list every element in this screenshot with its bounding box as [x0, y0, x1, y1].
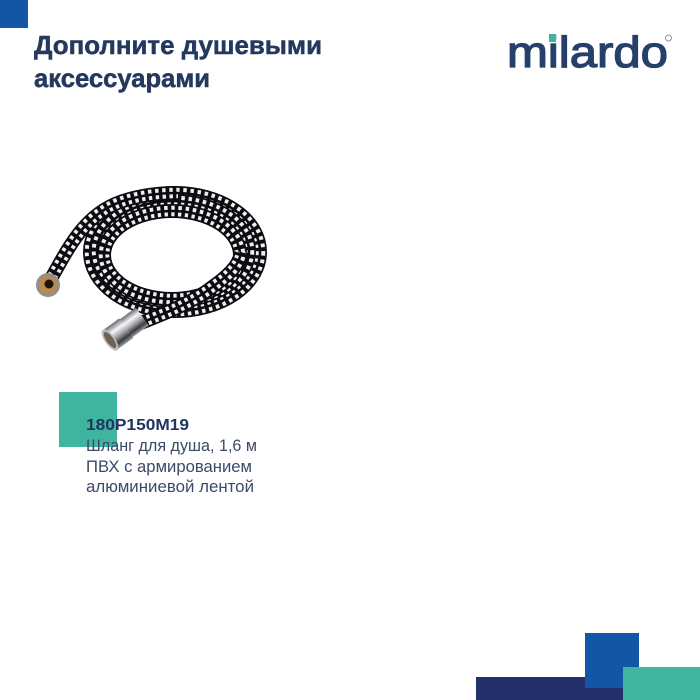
- chrome ferrule: [99, 306, 150, 353]
- decorative bottom-right blocks: [476, 633, 700, 700]
- teal accent square: [59, 392, 117, 447]
- title: [34, 30, 322, 93]
- title: аксессуарами: [34, 63, 210, 93]
- logo: milardo: milardo: [507, 28, 668, 77]
- decorative corner square: [0, 0, 28, 28]
- product description: [86, 417, 257, 496]
- product image: shower hose: [36, 193, 260, 353]
- product description: ПВХ с армированием: [86, 458, 252, 476]
- left brass fitting: [36, 273, 60, 297]
- title: Дополните душевыми: [34, 30, 322, 60]
- product description: алюминиевой лентой: [86, 478, 254, 496]
- product description: 180P150M19: [86, 417, 189, 434]
- product description: Шланг для душа, 1,6 м: [86, 437, 257, 455]
